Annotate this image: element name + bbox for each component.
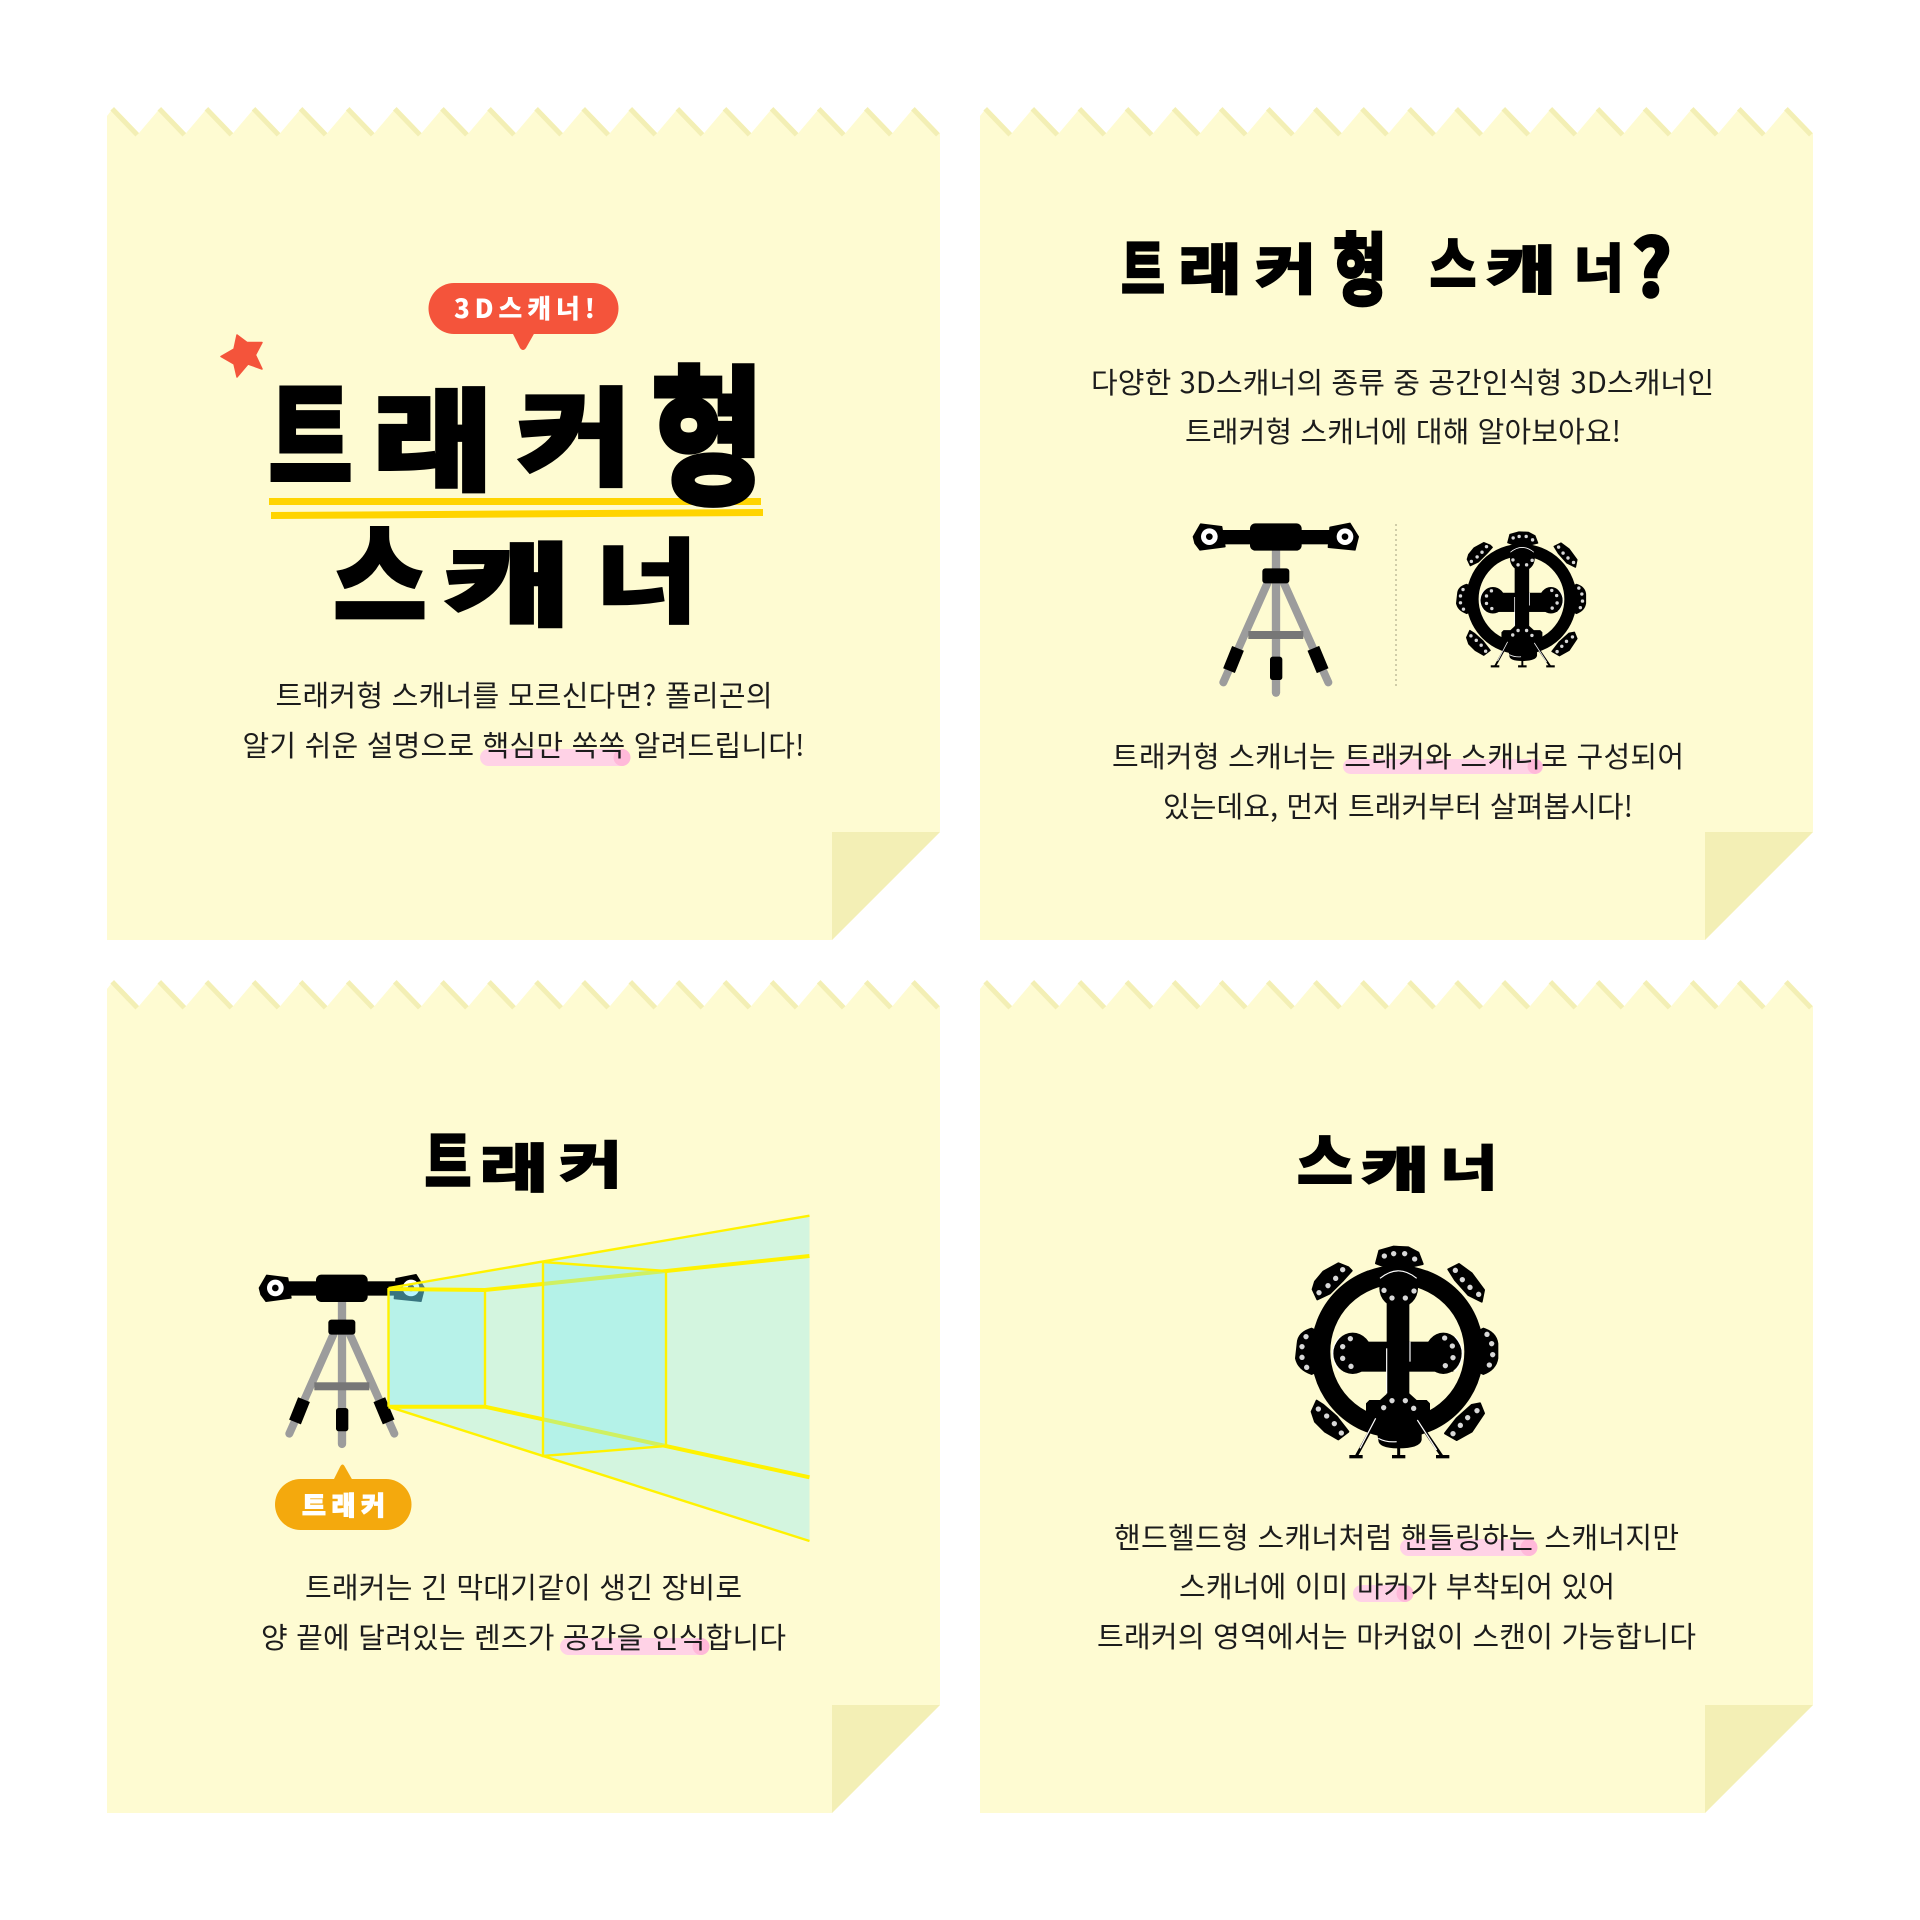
diagram: tracker scan volume	[388, 1216, 810, 1541]
panel: intro note paper	[107, 107, 940, 940]
heading: 트래커: 커	[560, 1126, 622, 1198]
text block: tracker and scanner composition: 있는데요, 먼저 트래커부터 살펴봅시다!	[1163, 784, 1633, 826]
heading: 트래커형 스캐너?: 스	[1430, 217, 1476, 304]
title: 트래커형 스캐너: 스	[334, 487, 426, 653]
heading: 트래커	[425, 1109, 622, 1205]
icon: handheld scanner small	[1456, 532, 1586, 667]
heading: 트래커형 스캐너?: 너	[1574, 228, 1624, 303]
heading: 스캐너: 스	[1297, 1115, 1353, 1202]
title underline: yellow double strokes	[269, 498, 763, 519]
panel: tracker note paper	[107, 980, 940, 1813]
heading: 트래커: 트	[425, 1109, 471, 1205]
highlight: 트래커와 스캐너	[1343, 759, 1543, 774]
title: 트래커형 스캐너: 형	[652, 321, 764, 535]
heading: 스캐너: 캐	[1361, 1132, 1429, 1201]
text block: tracker and scanner composition	[1112, 734, 1684, 826]
text block: tracker and scanner composition: 트래커형 스캐너는 트래커와 스캐너로 구성되어	[1112, 734, 1684, 776]
text block: intro description	[242, 673, 804, 765]
text block: tracker description: 트래커는 긴 막대기같이 생긴 장비로	[305, 1565, 742, 1607]
callout: 3D scanner speech bubble	[428, 283, 618, 350]
callout: tracker label bubble	[275, 1464, 412, 1530]
text block: intro description: 알기 쉬운 설명으로 핵심만 쏙쏙 알려드립니다!	[242, 723, 804, 765]
heading: 트래커형 스캐너?: 래	[1179, 227, 1241, 305]
panel: what is a tracker scanner note paper	[980, 107, 1813, 940]
heading: 트래커형 스캐너?: 형	[1333, 207, 1387, 321]
heading: 트래커형 스캐너?: 캐	[1486, 228, 1556, 304]
icon: handheld scanner large	[1295, 1247, 1498, 1458]
title: 트래커형 스캐너: 래	[373, 353, 493, 513]
text block: scanner types intro: 다양한 3D스캐너의 종류 중 공간인식형 3D스캐너인	[1091, 360, 1714, 402]
text block: scanner description: 핸드헬드형 스캐너처럼 핸들링하는 스캐너지만	[1114, 1515, 1679, 1557]
title: 트래커형 스캐너	[269, 321, 764, 653]
title: 트래커형 스캐너: 트	[269, 342, 352, 516]
heading: 스캐너	[1297, 1115, 1498, 1202]
text block: tracker description: 양 끝에 달려있는 렌즈가 공간을 인식합니다	[261, 1615, 786, 1657]
title: 트래커형 스캐너: 너	[596, 509, 698, 640]
icon: red star	[221, 335, 262, 377]
callout: tracker label bubble: 트래커	[302, 1486, 385, 1523]
text block: scanner description	[1097, 1515, 1696, 1656]
text block: scanner types intro: 트래커형 스캐너에 대해 알아보아요!	[1185, 409, 1621, 451]
text block: scanner description: 트래커의 영역에서는 마커없이 스캔이 가능합니다	[1097, 1614, 1696, 1656]
heading: 트래커: 래	[480, 1128, 548, 1202]
heading: 스캐너: 너	[1440, 1130, 1498, 1199]
text block: scanner types intro	[1091, 360, 1714, 451]
highlight: 핵심만 쏙쏙	[480, 749, 630, 766]
text block: intro description: 트래커형 스캐너를 모르신다면? 폴리곤의	[276, 673, 772, 715]
title: 트래커형 스캐너: 커	[517, 355, 633, 507]
callout: 3D scanner speech bubble: 3D스캐너!	[454, 289, 595, 326]
text block: tracker description	[261, 1565, 786, 1657]
icon: tracker on tripod	[259, 1275, 424, 1444]
title: 트래커형 스캐너: 캐	[444, 514, 570, 644]
heading: 트래커형 스캐너?: 트	[1121, 219, 1165, 312]
panel: scanner note paper	[980, 980, 1813, 1813]
heading: 트래커형 스캐너?	[1121, 206, 1671, 321]
heading: 트래커형 스캐너?: 커	[1256, 227, 1316, 305]
highlight: 핸들링하는 and 마커	[1353, 1539, 1538, 1602]
heading: 트래커형 스캐너?: ?	[1633, 206, 1671, 319]
text block: scanner description: 스캐너에 이미 마커가 부착되어 있어	[1179, 1564, 1615, 1606]
highlight: 공간을 인식	[560, 1638, 710, 1655]
icon: tracker on tripod	[1193, 523, 1358, 693]
